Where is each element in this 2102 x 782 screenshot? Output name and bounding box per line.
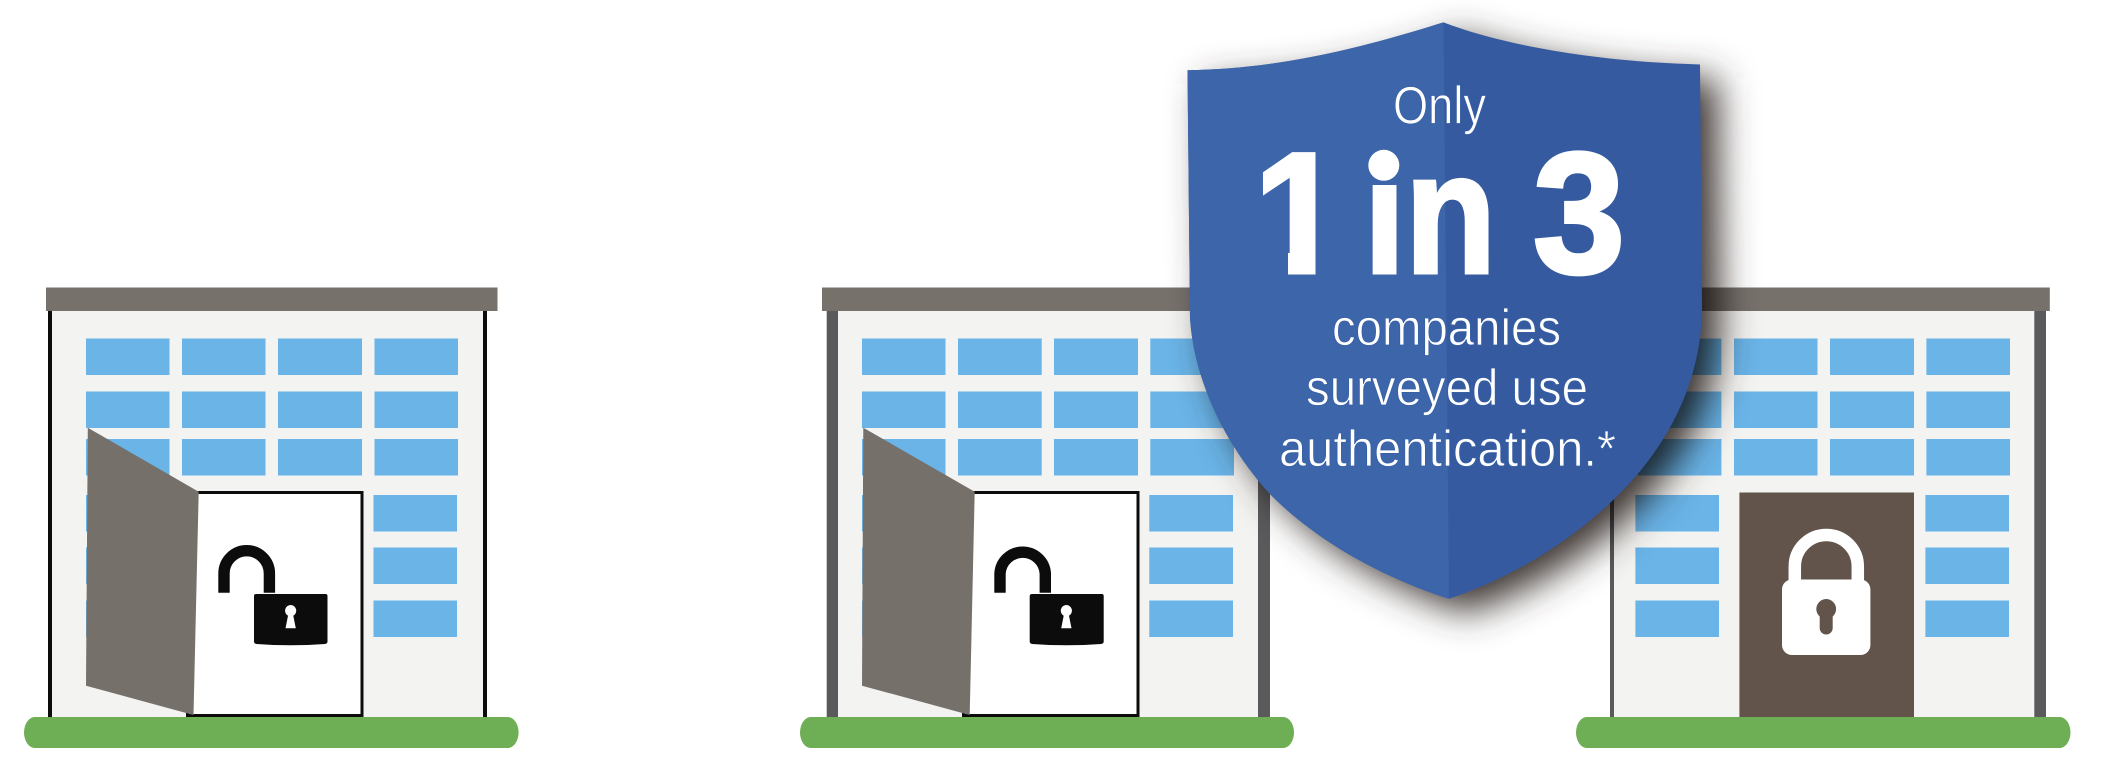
text: companies surveyed use authentication: surveyed use xyxy=(1306,359,1588,416)
windows xyxy=(1635,338,2010,637)
text: companies surveyed use authentication xyxy=(1279,299,1616,477)
building 1: open door, unlocked xyxy=(24,288,519,748)
icon: open padlock xyxy=(1000,552,1104,645)
side walls xyxy=(48,310,487,717)
closed door xyxy=(1739,492,1914,718)
shield right half xyxy=(1188,22,1702,599)
door frame xyxy=(964,492,1138,716)
icon: open padlock xyxy=(224,551,328,645)
text: Only: Only xyxy=(1393,77,1486,136)
text: 1 in 3: 3 xyxy=(1533,118,1625,310)
grass xyxy=(1576,717,2070,748)
building 3: closed door, locked xyxy=(1576,288,2070,748)
text: companies surveyed use authentication: companies xyxy=(1332,299,1561,356)
grass xyxy=(800,717,1294,748)
wall xyxy=(1610,310,2046,717)
door leaf xyxy=(862,428,975,715)
windows xyxy=(862,338,1234,637)
shield drop shadow xyxy=(1206,36,1720,613)
side walls xyxy=(1610,310,2046,717)
side walls xyxy=(827,310,1270,717)
roof xyxy=(822,288,1274,311)
text: 1 in 3: in xyxy=(1364,118,1496,310)
roof xyxy=(46,288,498,311)
door frame xyxy=(188,492,362,716)
door leaf xyxy=(86,428,199,715)
text: 1 in 3 xyxy=(1262,150,1621,276)
wall xyxy=(48,310,487,717)
icon: closed padlock xyxy=(1782,535,1870,655)
text: companies surveyed use authentication: authentication.* xyxy=(1279,420,1616,477)
grass xyxy=(24,717,519,748)
shield callout xyxy=(1188,22,1702,599)
roof xyxy=(1598,288,2050,311)
text: 1 in 3: 1 xyxy=(1254,118,1344,310)
shield left half xyxy=(1188,22,1449,599)
wall xyxy=(827,310,1270,717)
building 2: open door, unlocked xyxy=(800,288,1294,748)
windows xyxy=(86,338,458,637)
